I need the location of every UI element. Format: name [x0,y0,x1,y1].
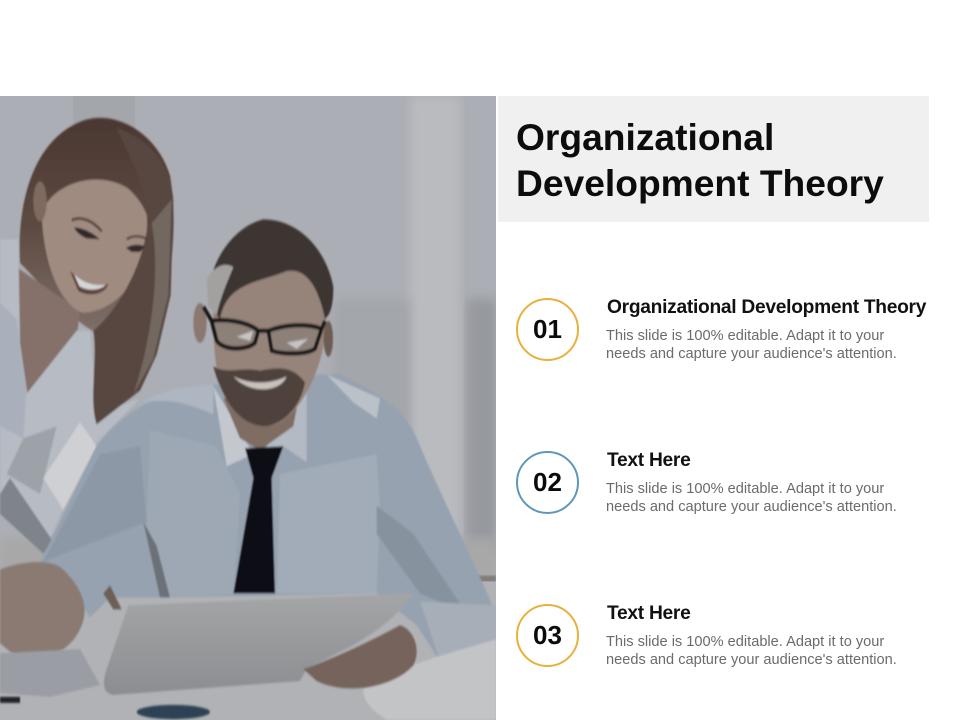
neck [223,390,300,450]
tablet [104,593,413,695]
item 02 text [606,481,897,515]
beard [213,367,305,426]
hair back [20,118,174,335]
title [516,116,884,204]
badge 01 [516,298,579,361]
title: Development Theory [516,162,884,204]
item 02 text: This slide is 100% editable. Adapt it to your [606,481,884,497]
item 01 heading: Organizational Development Theory [607,297,926,318]
hair right strand [93,128,173,424]
item 03 text: needs and capture your audience's attention. [606,652,897,668]
photo: two colleagues looking at a tablet [0,96,496,720]
brows [72,218,102,231]
badge 02 [516,451,579,514]
badge 01: 01 [533,314,562,344]
title panel [498,96,929,222]
mouth [70,271,108,294]
badge 02: 02 [533,467,562,497]
shirt and arms [37,375,496,661]
tie [233,446,283,593]
item 02 heading: Text Here [607,450,691,471]
eyes [74,227,100,239]
face [42,180,151,313]
hair [209,219,333,319]
item 03 text [606,634,897,668]
background office [0,96,496,720]
item 03 text: This slide is 100% editable. Adapt it to your [606,634,884,650]
glasses [203,307,325,353]
item 01 text [606,328,897,362]
right hand [303,625,417,688]
item 01 text: needs and capture your audience's attention. [606,346,897,362]
title: Organizational [516,116,774,158]
item 03 heading: Text Here [607,603,691,624]
collar [213,387,253,466]
woman [0,118,174,554]
head [213,251,326,426]
badge 03 [516,604,579,667]
badge 03: 03 [533,620,562,650]
item 01 text: This slide is 100% editable. Adapt it to your [606,328,884,344]
blouse [0,239,140,554]
neck and chest [17,267,80,398]
left hand [0,562,122,660]
desk items [0,639,496,720]
man [37,219,496,661]
item 02 text: needs and capture your audience's attention. [606,499,897,515]
